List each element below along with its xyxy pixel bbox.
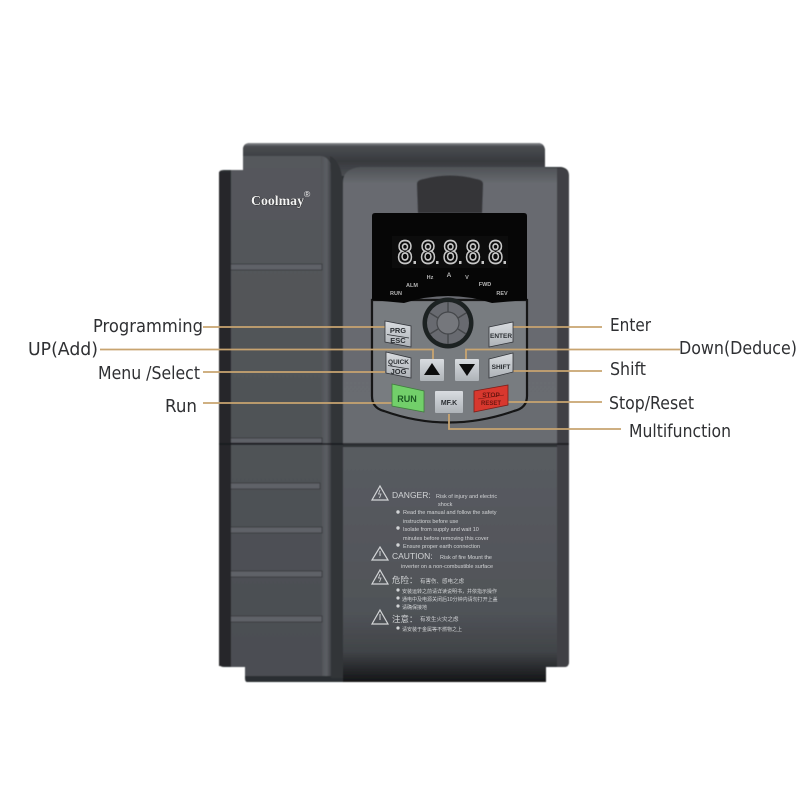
danger english: DANGER: xyxy=(392,490,431,500)
brand logo: Coolmay xyxy=(251,193,304,208)
button: RUN: RUN xyxy=(397,394,417,404)
danger chinese: 危险： xyxy=(392,575,418,585)
black display xyxy=(372,213,527,303)
indicator labels: Hz xyxy=(427,275,434,281)
LED digits: 88888 xyxy=(397,234,504,270)
caution chinese: 请安装于金属等不燃物之上 xyxy=(402,626,462,633)
left labels: UP(Add) xyxy=(28,340,98,360)
digit glow xyxy=(392,236,508,268)
danger english: Ensure proper earth connection xyxy=(403,544,480,550)
danger english xyxy=(372,486,497,550)
button: QUICK/JOG: QUICK xyxy=(388,359,409,366)
button: PRG/ESC: PRG xyxy=(390,326,406,335)
inverter device xyxy=(219,143,569,682)
danger english: instructions before use xyxy=(403,519,458,525)
brand logo: ® xyxy=(304,189,311,199)
caution english: inverter on a non-combustible surface xyxy=(401,564,493,570)
left labels: Programming xyxy=(93,317,203,337)
button: down arrow xyxy=(455,359,479,381)
left labels xyxy=(28,317,203,417)
danger english: Read the manual and follow the safety xyxy=(403,510,497,516)
column shadow stripe xyxy=(330,156,343,678)
caution chinese xyxy=(372,610,462,633)
button: QUICK/JOG: JOG xyxy=(391,367,407,376)
danger english: Isolate from supply and wait 10 xyxy=(403,527,479,533)
button: STOP/RESET: RESET xyxy=(481,401,501,407)
danger chinese: 安装运转之前请详读说明书，并依指示操作 xyxy=(402,588,497,595)
right labels: Multifunction xyxy=(629,422,731,442)
cover panel xyxy=(343,447,557,682)
central face panel xyxy=(343,167,557,445)
left labels: Run xyxy=(165,397,197,417)
danger chinese: 通电中及电源关闭后10分钟内请勿打开上盖 xyxy=(402,596,498,603)
indicator labels: ALM xyxy=(406,283,418,289)
danger english: minutes before removing this cover xyxy=(403,536,489,542)
indicator labels: V xyxy=(465,275,469,281)
right side edge xyxy=(557,168,569,667)
device silhouette xyxy=(219,143,569,682)
callout lines xyxy=(100,327,680,429)
brand logo xyxy=(251,189,311,208)
button: QUICK/JOG xyxy=(386,352,411,378)
danger chinese: 请确保接地 xyxy=(402,604,427,611)
keypad dial xyxy=(422,298,474,348)
left side column xyxy=(219,156,343,678)
caution english xyxy=(372,547,493,570)
top band xyxy=(243,143,545,176)
warning label xyxy=(372,486,498,633)
caution chinese: 注意： xyxy=(392,614,418,624)
danger chinese xyxy=(372,570,498,611)
danger english: Risk of injury and electric xyxy=(436,494,497,500)
button: PRG/ESC xyxy=(385,321,411,347)
dark left edge xyxy=(219,172,231,666)
keypad bezel xyxy=(372,300,527,422)
right labels: Enter xyxy=(610,316,652,336)
decimal points xyxy=(414,261,506,264)
right labels xyxy=(609,316,797,442)
caution english: Risk of fire Mount the xyxy=(440,555,492,561)
danger english: shock xyxy=(438,502,453,508)
indicator labels: A xyxy=(447,272,452,279)
right labels: Stop/Reset xyxy=(609,394,694,414)
button: ENTER: ENTER xyxy=(490,333,512,340)
button: STOP/RESET xyxy=(474,385,508,412)
caution chinese: 有发生火灾之虑 xyxy=(420,615,459,623)
indicator labels: RUN xyxy=(390,291,402,297)
indicator labels: FWD xyxy=(479,282,491,288)
hinge tab above display xyxy=(417,176,483,213)
button: STOP/RESET: STOP xyxy=(482,392,500,399)
lower cover xyxy=(219,444,569,682)
button: MF.K: MF.K xyxy=(441,400,457,407)
danger chinese: 有害伤、感电之虑 xyxy=(420,577,465,585)
column highlight edge xyxy=(321,156,332,676)
caution english: CAUTION: xyxy=(392,551,433,561)
left labels: Menu /Select xyxy=(98,364,200,384)
seam line xyxy=(219,443,569,445)
indicator labels xyxy=(390,272,508,297)
left column panel xyxy=(231,156,332,676)
indicator labels: REV xyxy=(496,291,508,297)
display window xyxy=(372,213,527,303)
button: SHIFT: SHIFT xyxy=(492,364,510,371)
button: up arrow xyxy=(420,359,444,381)
right labels: Shift xyxy=(610,360,646,380)
button: PRG/ESC: ESC xyxy=(390,336,406,345)
left column ribs xyxy=(229,264,322,622)
keypad buttons xyxy=(385,321,513,413)
